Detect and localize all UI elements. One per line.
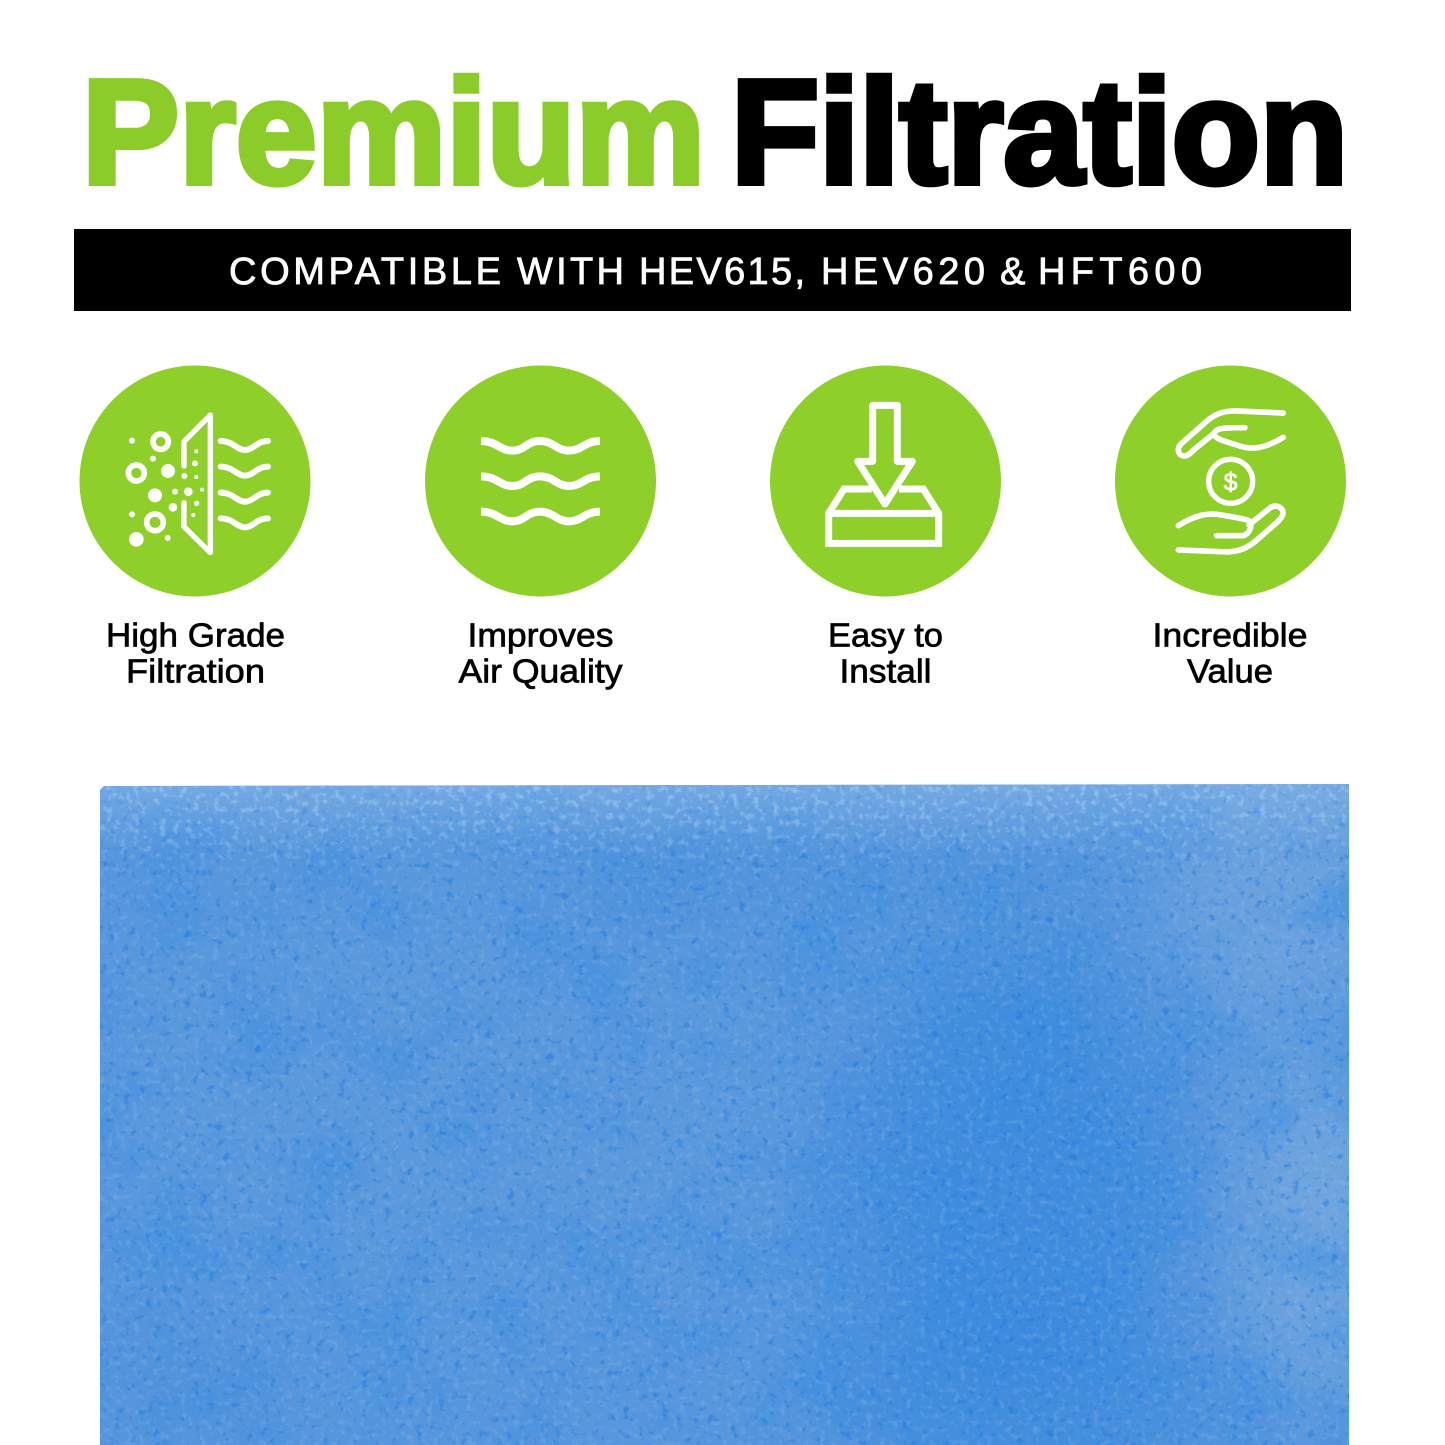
label: Air Quality <box>458 654 623 690</box>
label: Install <box>840 654 932 690</box>
label: Improves <box>468 618 614 654</box>
feature: improves air quality <box>425 366 656 690</box>
label: Incredible <box>1152 618 1308 654</box>
title word: Premium: Premium <box>82 50 705 215</box>
feature: high grade filtration <box>80 366 310 690</box>
banner text: HFT600 <box>1038 251 1202 293</box>
dollar sign: $ <box>1224 469 1238 496</box>
icon: hands around coin <box>1115 366 1346 596</box>
banner text: & <box>1000 251 1025 293</box>
label: Value <box>1187 654 1273 690</box>
banner text: COMPATIBLE <box>229 251 501 293</box>
feature: incredible value <box>1115 366 1346 690</box>
banner text: HEV620 <box>821 251 985 293</box>
label: Filtration <box>126 654 265 690</box>
icon: arrow into tray <box>770 366 1001 596</box>
icon: air waves <box>425 366 656 596</box>
icon: filter with particles <box>80 366 310 596</box>
banner text: HEV615, <box>639 251 805 293</box>
label: High Grade <box>106 618 285 654</box>
blue foam filter photo <box>50 770 1390 1445</box>
banner text <box>229 251 1202 293</box>
title word: Filtration: Filtration <box>731 50 1348 215</box>
compatibility banner <box>74 229 1351 311</box>
feature: easy to install <box>770 366 1001 690</box>
title <box>82 50 1348 215</box>
label: Easy to <box>828 618 943 654</box>
banner text: WITH <box>517 251 624 293</box>
